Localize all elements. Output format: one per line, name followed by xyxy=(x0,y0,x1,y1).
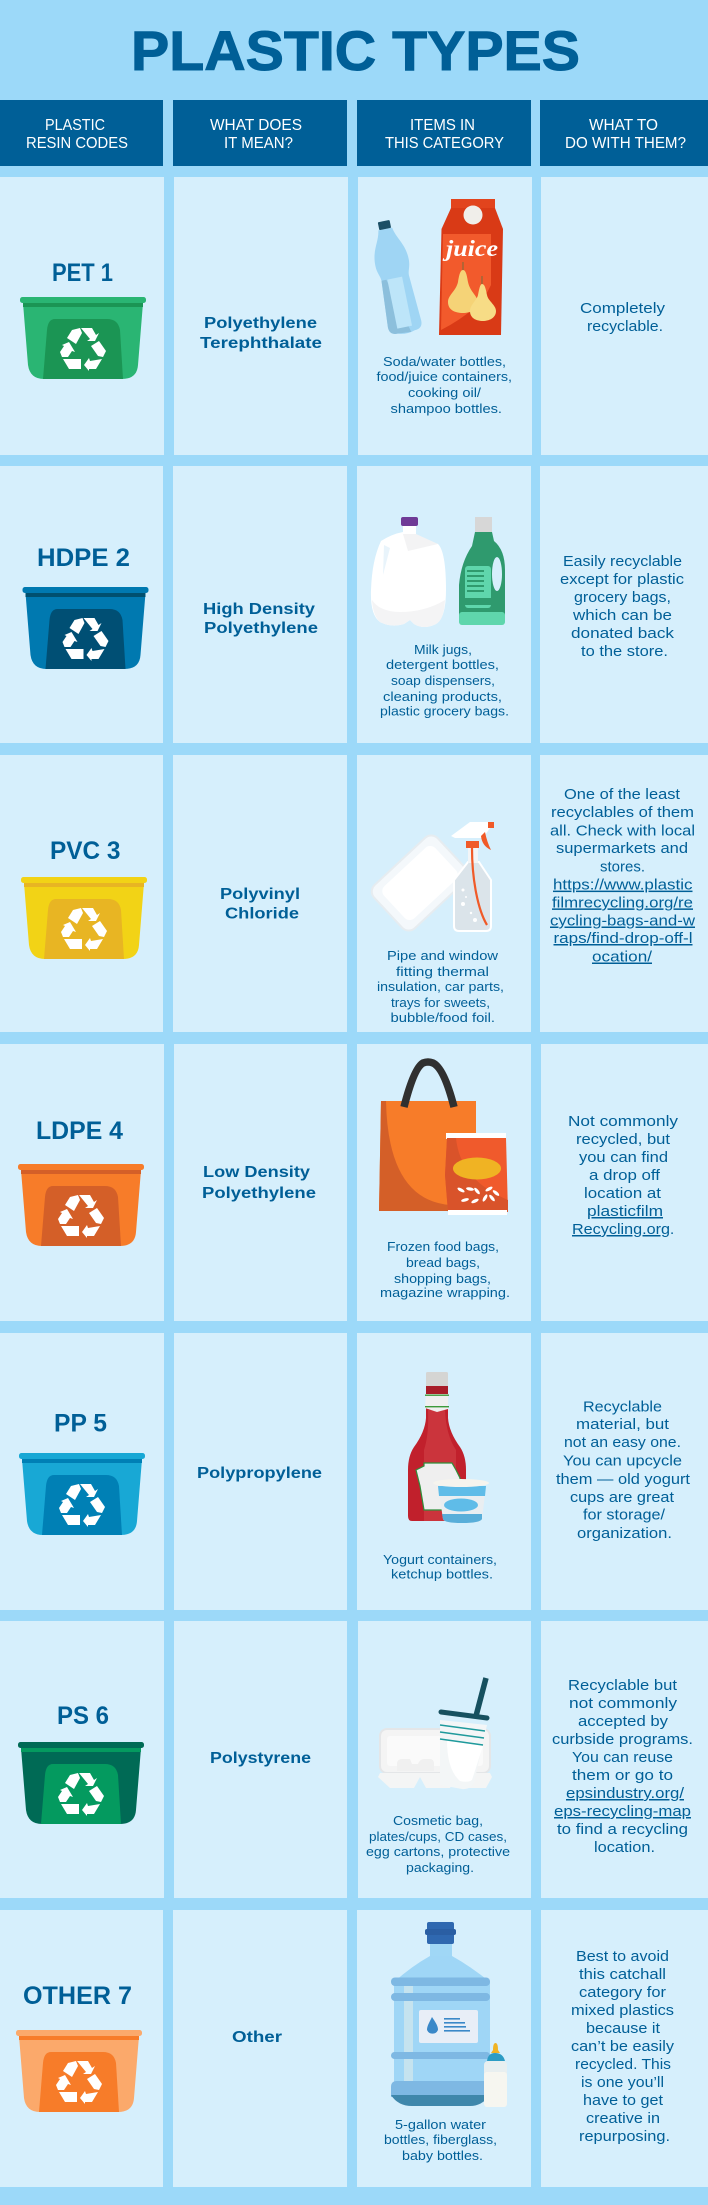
advice text: You can upcycle xyxy=(563,1452,682,1470)
advice text: cups are great xyxy=(570,1489,675,1506)
advice text with link xyxy=(552,1677,693,1856)
advice text: Easily recyclable xyxy=(563,553,682,570)
advice text with link: . xyxy=(670,1221,674,1238)
caption: items xyxy=(376,354,512,416)
advice text with link: location at xyxy=(584,1185,662,1202)
illustration: juice carton: juice xyxy=(441,236,498,261)
advice text with link: accepted by xyxy=(578,1713,669,1730)
code: HDPE 2: HDPE 2 xyxy=(37,544,130,572)
header: what to do with them: WHAT TO xyxy=(589,117,658,134)
advice text with link: curbside programs. xyxy=(552,1731,693,1748)
code: PVC 3: PVC 3 xyxy=(50,837,120,865)
advice text with link: Recyclable but xyxy=(568,1677,678,1694)
advice text: creative in xyxy=(586,2110,660,2127)
advice text with link: epsindustry.org/ xyxy=(566,1785,685,1802)
advice text: have to get xyxy=(583,2092,664,2109)
caption: items: egg cartons, protective xyxy=(366,1844,510,1859)
caption: items: fitting thermal xyxy=(396,964,489,979)
caption: items: Yogurt containers, xyxy=(383,1552,497,1567)
caption: items: Milk jugs, xyxy=(414,642,472,657)
name: high density polyethylene: Polyethylene xyxy=(204,620,318,637)
name: polystyrene: Polystyrene xyxy=(210,1750,311,1767)
header: what to do with them xyxy=(565,117,686,152)
advice text with link: https://www.plastic xyxy=(553,877,693,894)
caption: items: baby bottles. xyxy=(402,2148,483,2163)
header: items in this category xyxy=(385,117,504,152)
header: plastic resin codes: PLASTIC xyxy=(45,117,105,134)
caption: items: trays for sweets, xyxy=(391,995,490,1010)
caption: items: Frozen food bags, xyxy=(387,1239,499,1254)
advice text: recycled. This xyxy=(575,2056,671,2073)
name: polyethylene terephthalate xyxy=(200,315,322,352)
caption: items: magazine wrapping. xyxy=(380,1285,510,1300)
advice text with link: all. Check with local xyxy=(550,822,695,840)
panel: PS 6 row xyxy=(0,1621,708,1898)
title: PLASTIC TYPES xyxy=(131,19,580,82)
caption: items: shampoo bottles. xyxy=(390,401,502,416)
advice text with link: a drop off xyxy=(589,1167,661,1184)
illustration: egg carton xyxy=(378,1729,492,1788)
advice text with link: ocation/ xyxy=(592,948,653,966)
header: plastic resin codes: RESIN CODES xyxy=(26,135,128,152)
panel: PP 5 row xyxy=(0,1333,708,1610)
advice text with link: stores. xyxy=(600,858,645,876)
advice text: category for xyxy=(579,1984,666,2001)
advice text with link: not commonly xyxy=(569,1695,678,1712)
name: polyvinyl chloride: Polyvinyl xyxy=(220,886,300,903)
advice text: to the store. xyxy=(581,643,668,660)
caption: items: plastic grocery bags. xyxy=(380,704,509,718)
code: PET 1: PET 1 xyxy=(52,259,113,287)
caption: items: 5-gallon water xyxy=(395,2117,487,2132)
caption: items: plates/cups, CD cases, xyxy=(369,1829,507,1844)
illustration: water jug xyxy=(391,1922,490,2106)
advice text: because it xyxy=(586,2020,661,2037)
advice text with link: plasticfilm xyxy=(587,1203,663,1220)
header: items in this category: ITEMS IN xyxy=(410,117,475,134)
caption: items: food/juice containers, xyxy=(376,369,512,384)
advice text: except for plastic xyxy=(560,571,685,588)
caption: items xyxy=(384,2117,497,2163)
code: PP 5: PP 5 xyxy=(54,1410,107,1438)
advice text: grocery bags, xyxy=(574,589,671,606)
caption: items: Cosmetic bag, xyxy=(393,1813,483,1828)
illustration: shopping bag xyxy=(379,1062,476,1211)
advice text xyxy=(580,300,666,335)
advice text: them — old yogurt xyxy=(556,1471,691,1488)
advice text: for storage/ xyxy=(583,1507,666,1524)
caption: items xyxy=(380,642,509,718)
header: plastic resin codes xyxy=(26,117,128,152)
advice text: recyclable. xyxy=(587,318,663,335)
caption: items: Soda/water bottles, xyxy=(383,354,506,369)
advice text with link: One of the least xyxy=(564,786,681,803)
name: polyvinyl chloride: Chloride xyxy=(225,906,299,922)
advice text with link: recyclables of them xyxy=(551,804,694,821)
advice text: Recyclable xyxy=(583,1398,662,1416)
advice text with link: supermarkets and xyxy=(556,840,688,857)
advice text: Best to avoid xyxy=(576,1948,669,1965)
caption: items: packaging. xyxy=(406,1860,474,1875)
advice text with link xyxy=(568,1113,679,1238)
name: low density polyethylene xyxy=(202,1164,316,1202)
name: polypropylene: Polypropylene xyxy=(197,1465,322,1482)
icon: light blue recycling bin xyxy=(19,1453,145,1535)
header: items in this category: THIS CATEGORY xyxy=(385,135,504,152)
caption: items xyxy=(380,1239,510,1300)
advice text with link: you can find xyxy=(579,1149,668,1166)
name: polyethylene terephthalate: Terephthalate xyxy=(200,335,322,352)
panel: PET 1 row xyxy=(0,177,708,455)
illustration: milk jug xyxy=(371,517,446,627)
caption: items xyxy=(383,1552,497,1582)
name: high density polyethylene: High Density xyxy=(203,601,315,618)
illustration: ketchup bottle xyxy=(408,1372,466,1521)
icon: orange recycling bin xyxy=(18,1164,144,1246)
advice text: Completely xyxy=(580,300,666,317)
advice text: this catchall xyxy=(579,1966,666,1983)
advice text with link: cycling-bags-and-w xyxy=(550,912,695,930)
icon: dark green recycling bin xyxy=(18,1742,144,1824)
code: OTHER 7: OTHER 7 xyxy=(23,1982,132,2010)
advice text xyxy=(556,1398,691,1542)
advice text with link: You can reuse xyxy=(572,1749,673,1766)
header row xyxy=(0,100,708,166)
caption: items: bubble/food foil. xyxy=(390,1010,495,1025)
advice text: organization. xyxy=(577,1525,672,1542)
advice text: donated back xyxy=(571,625,675,642)
advice text xyxy=(571,1948,675,2145)
panel: HDPE 2 row xyxy=(0,466,708,743)
advice text with link: recycled, but xyxy=(576,1131,671,1148)
panel: LDPE 4 row xyxy=(0,1044,708,1321)
advice text: which can be xyxy=(572,607,672,624)
illustration: yogurt cup xyxy=(433,1479,489,1523)
icon: green recycling bin xyxy=(20,297,146,379)
advice text with link: to find a recycling xyxy=(557,1821,688,1838)
panel: OTHER 7 row xyxy=(0,1910,708,2187)
advice text: not an easy one. xyxy=(564,1434,681,1451)
caption: items: ketchup bottles. xyxy=(391,1566,493,1582)
advice text with link: filmrecycling.org/re xyxy=(552,894,693,911)
illustration: food tray xyxy=(368,832,472,934)
caption: items: cooking oil/ xyxy=(408,385,481,400)
advice text xyxy=(560,553,685,660)
illustration: snack bag xyxy=(445,1133,508,1215)
caption: items: bread bags, xyxy=(406,1255,480,1270)
advice text with link: Recycling.org xyxy=(572,1221,670,1238)
advice text with link: location. xyxy=(594,1839,655,1856)
illustration: juice carton xyxy=(439,199,503,335)
illustration: spray bottle xyxy=(451,822,494,931)
code: PS 6: PS 6 xyxy=(57,1702,109,1730)
caption: items xyxy=(377,948,504,1025)
caption: items: cleaning products, xyxy=(383,689,502,704)
name: polyvinyl chloride xyxy=(220,886,300,922)
illustration: detergent bottle xyxy=(459,517,505,625)
caption: items: soap dispensers, xyxy=(391,673,495,688)
name: low density polyethylene: Polyethylene xyxy=(202,1185,316,1202)
header: what to do with them: DO WITH THEM? xyxy=(565,135,686,152)
name: other: Other xyxy=(232,2029,282,2046)
name: polyethylene terephthalate: Polyethylene xyxy=(204,315,317,332)
caption: items xyxy=(366,1813,510,1875)
illustration: cup with straw xyxy=(440,1678,487,1789)
advice text: mixed plastics xyxy=(571,2002,674,2019)
icon: yellow recycling bin xyxy=(21,877,147,959)
advice text: repurposing. xyxy=(579,2128,670,2145)
header: what does it mean: IT MEAN? xyxy=(224,135,293,152)
advice text with link: Not commonly xyxy=(568,1113,679,1130)
illustration: baby bottle xyxy=(484,2043,507,2107)
caption: items: Pipe and window xyxy=(387,948,499,963)
code: LDPE 4: LDPE 4 xyxy=(36,1117,123,1145)
advice text with link: them or go to xyxy=(572,1767,673,1784)
panel: PVC 3 row xyxy=(0,755,708,1032)
advice text with link: raps/find-drop-off-l xyxy=(554,930,692,947)
advice text: is one you’ll xyxy=(581,2074,664,2091)
caption: items: bottles, fiberglass, xyxy=(384,2132,497,2147)
caption: items: insulation, car parts, xyxy=(377,979,504,994)
icon: peach recycling bin xyxy=(16,2030,142,2112)
name: low density polyethylene: Low Density xyxy=(203,1164,310,1181)
caption: items: detergent bottles, xyxy=(386,657,499,672)
advice text with link xyxy=(550,786,695,966)
advice text: can’t be easily xyxy=(571,2038,675,2055)
advice text: material, but xyxy=(576,1416,670,1433)
illustration: water bottle xyxy=(367,218,423,337)
header: what does it mean xyxy=(210,117,302,152)
icon: blue recycling bin xyxy=(22,587,148,669)
name: high density polyethylene xyxy=(203,601,318,637)
advice text with link: eps-recycling-map xyxy=(554,1803,691,1820)
header: what does it mean: WHAT DOES xyxy=(210,117,302,134)
caption: items: shopping bags, xyxy=(394,1271,491,1286)
